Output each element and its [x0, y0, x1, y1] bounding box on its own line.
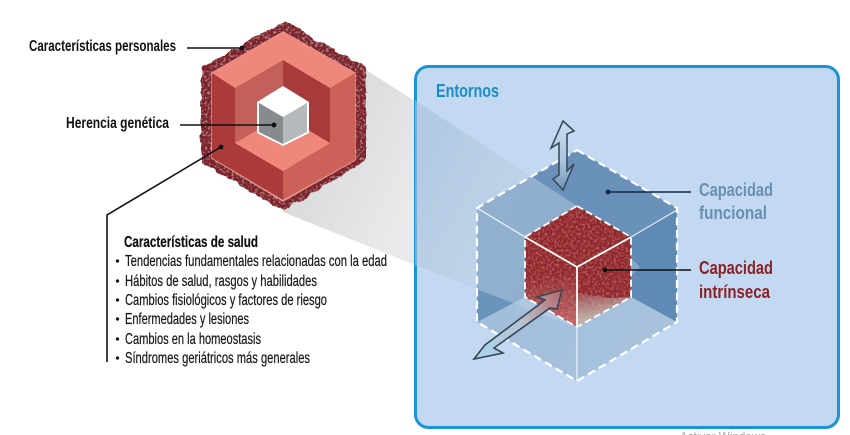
white cube top [259, 88, 307, 117]
label: capacidad intrinseca [603, 258, 773, 302]
list item 5: Cambios en la homeostasis [125, 331, 261, 348]
label: capacidad funcional: Capacidad [699, 180, 773, 200]
pale inner outline [212, 32, 355, 201]
hexagon cube: personal characteristics [202, 22, 365, 210]
hollow floor [235, 115, 330, 171]
red cube body [525, 206, 631, 327]
grey cube left face [259, 103, 283, 144]
dashed outline of red cube [525, 206, 631, 327]
ring top face [212, 32, 355, 88]
cube: capacidad intrinseca [525, 206, 631, 327]
cube right wall [577, 208, 677, 381]
arrow: vertical double [551, 121, 574, 190]
label: capacidad intrinseca: Capacidad [699, 258, 773, 278]
grey cube right face [283, 103, 307, 144]
projection beam: grey part [283, 70, 420, 267]
panel: entornos [416, 66, 838, 428]
list heading: Características de salud [124, 234, 258, 251]
text block: caracteristicas de salud [116, 234, 387, 367]
heading: Entornos: Entornos [436, 81, 499, 101]
list item 5 [116, 331, 261, 348]
cube top face [477, 150, 677, 267]
list item 6: Síndromes geriátricos más generales [125, 350, 310, 367]
label: herencia genetica [66, 115, 276, 132]
label: capacidad funcional [606, 180, 773, 223]
ring right wall [283, 73, 355, 200]
outer cube edges [477, 150, 677, 381]
leader line personales [187, 47, 242, 49]
light patch on lower left face [525, 275, 577, 327]
list item 3: Cambios fisiológicos y factores de riesgo [125, 292, 327, 309]
label: capacidad funcional: funcional [699, 203, 767, 223]
diagram: capacidad funcional cube [477, 150, 677, 381]
list item 1: Tendencias fundamentales relacionadas con la edad [125, 253, 387, 270]
list item 3 [116, 292, 327, 309]
list item 6 [116, 350, 310, 367]
leader line funcional [608, 191, 691, 193]
arrow: diagonal double [474, 290, 562, 359]
list item 4: Enfermedades y lesiones [125, 311, 249, 328]
leader line: caracteristicas de salud [107, 145, 223, 362]
white inner edges [525, 237, 631, 327]
projection beam: blue part [410, 97, 640, 328]
label: caracteristicas personales: Características personales [29, 38, 176, 55]
light patch on lower right face [577, 293, 631, 327]
hollow back left wall [235, 60, 283, 143]
rough outer shell [202, 22, 365, 210]
label: herencia genetica: Herencia genética [66, 115, 169, 132]
hollow back right wall [283, 60, 330, 143]
list item 2: Hábitos de salud, rasgos y habilidades [125, 273, 317, 290]
label: capacidad intrinseca: intrínseca [699, 282, 771, 302]
list item 4 [116, 311, 249, 328]
cube left wall [477, 208, 577, 381]
white cube outline [257, 86, 309, 146]
cube floor [477, 267, 677, 381]
ring left wall [212, 73, 283, 200]
leader line intrinseca [605, 269, 691, 271]
leader line herencia [180, 124, 274, 126]
